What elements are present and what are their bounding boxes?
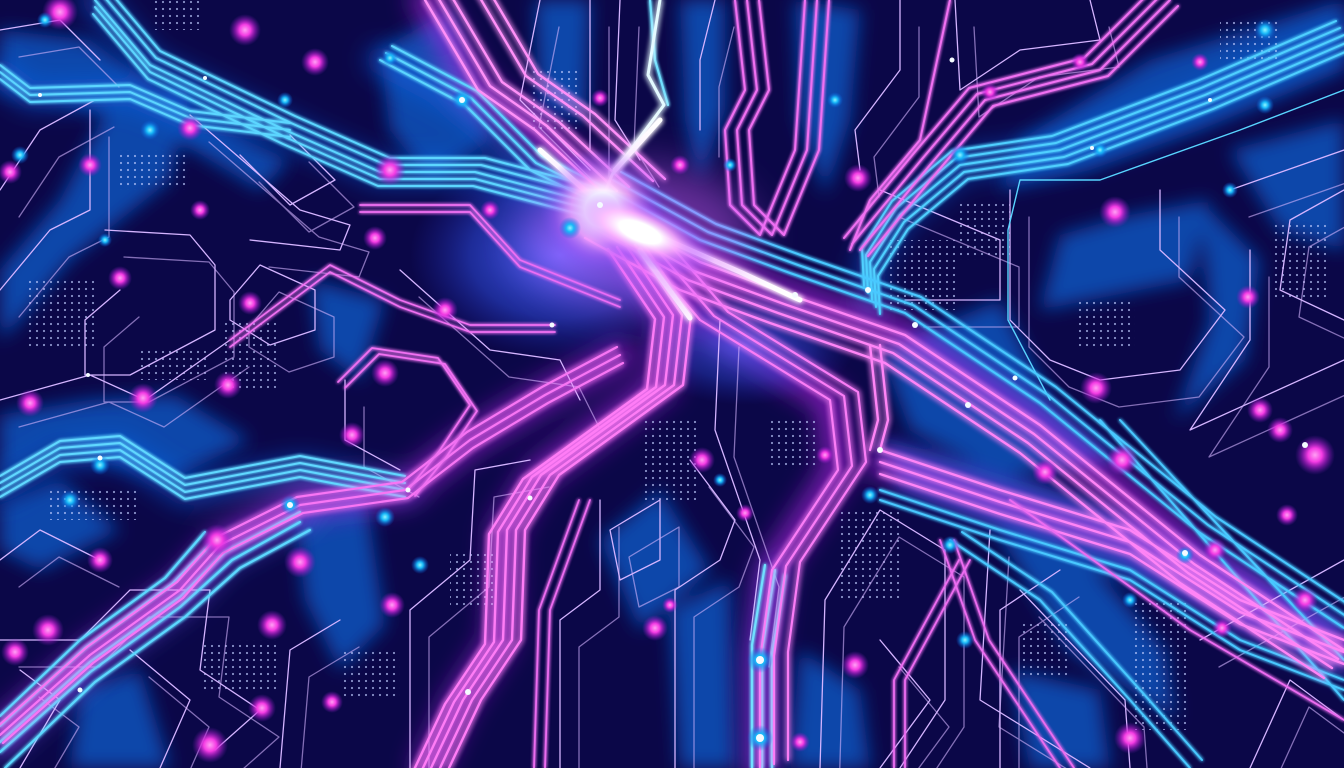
magenta lines: lower verticals <box>534 500 1344 768</box>
magenta bundle: down from centre <box>413 245 691 768</box>
central blue haze <box>410 150 710 360</box>
cyan bundle: lower right <box>605 172 1344 768</box>
cyan bundle: left horizontal <box>0 436 405 499</box>
magenta bundle: down centre right <box>640 242 866 768</box>
bright core around hub <box>540 120 800 318</box>
magenta bundle: upper right <box>725 0 1178 256</box>
magenta bundle: lower right from centre <box>585 210 1344 678</box>
magenta bundle: lower left diagonal <box>0 347 623 743</box>
cyan bundle: bottom centre <box>650 0 785 768</box>
white bright trace from top <box>600 0 664 205</box>
thin cyan trace: upper right outer <box>1008 90 1344 400</box>
magenta bundle: top left into centre <box>425 0 665 195</box>
cyan bundle: upper right <box>862 21 1344 314</box>
central glow hub <box>525 148 755 305</box>
magenta octagon and mid traces <box>230 205 620 496</box>
cyan bundle: lower left <box>0 512 310 768</box>
cyan bundle: upper left <box>0 0 612 219</box>
